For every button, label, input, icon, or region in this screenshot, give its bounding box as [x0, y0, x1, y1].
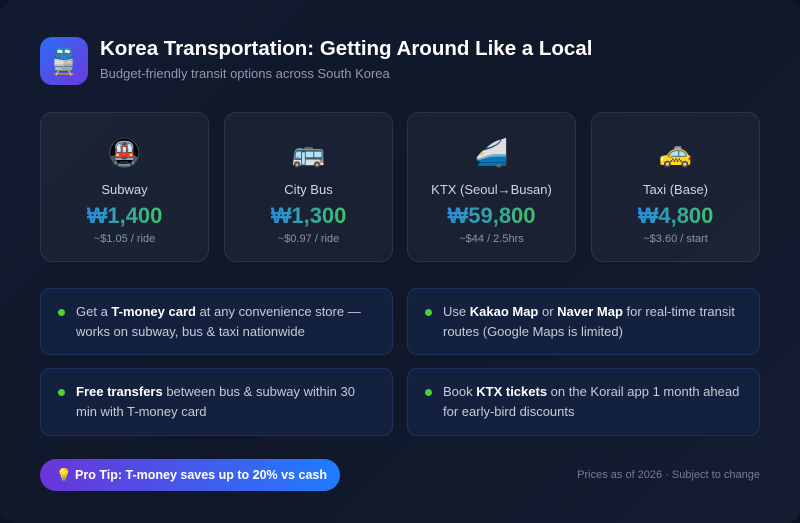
card: city bus: 🚌 [292, 138, 325, 168]
card: subway: Subway [101, 182, 148, 197]
card: KTX: KTX (Seoul→Busan) [431, 182, 552, 197]
pro tip pill [40, 459, 340, 491]
tip: maps: Use Kakao Map or Naver Map for real-time transit routes (Google Maps is limited) [443, 304, 735, 339]
card: KTX: ~$44 / 2.5hrs [459, 233, 524, 245]
tip: KTX tickets [407, 368, 760, 436]
card: KTX [407, 112, 576, 262]
card: subway [40, 112, 209, 262]
card: KTX: ₩59,800 [447, 203, 536, 228]
card: taxi: ₩4,800 [638, 203, 713, 228]
footer note: Prices as of 2026 · Subject to change [577, 469, 760, 481]
card: subway: ~$1.05 / ride [94, 233, 155, 245]
tip: KTX tickets: Book KTX tickets on the Korail app 1 month ahead for early-bird discounts [443, 384, 739, 419]
card: taxi: 🚕 [659, 138, 692, 168]
card: taxi: ~$3.60 / start [643, 233, 708, 245]
subtitle: Budget-friendly transit options across South Korea [100, 66, 390, 81]
title: Korea Transportation: Getting Around Like a Local [100, 37, 592, 60]
tip: transfers: Free transfers between bus & subway within 30 min with T-money card [76, 384, 355, 419]
card: KTX: 🚄 [475, 138, 508, 168]
card: subway: ₩1,400 [87, 203, 162, 228]
tip: T-money: Get a T-money card at any convenience store — works on subway, bus & taxi nationwide [76, 304, 361, 339]
pro tip pill: 💡 Pro Tip: T-money saves up to 20% vs cash [56, 468, 327, 482]
card: city bus: City Bus [284, 182, 333, 197]
icon: train: 🚆 [48, 46, 80, 76]
card: city bus: ~$0.97 / ride [278, 233, 339, 245]
tip: maps [407, 288, 760, 355]
card: city bus: ₩1,300 [271, 203, 346, 228]
card: city bus [224, 112, 393, 262]
tip: T-money [40, 288, 393, 355]
tip: transfers [40, 368, 393, 436]
card: subway: 🚇 [108, 138, 141, 168]
card: taxi: Taxi (Base) [643, 182, 708, 197]
icon: train [40, 37, 88, 85]
card: taxi [591, 112, 760, 262]
